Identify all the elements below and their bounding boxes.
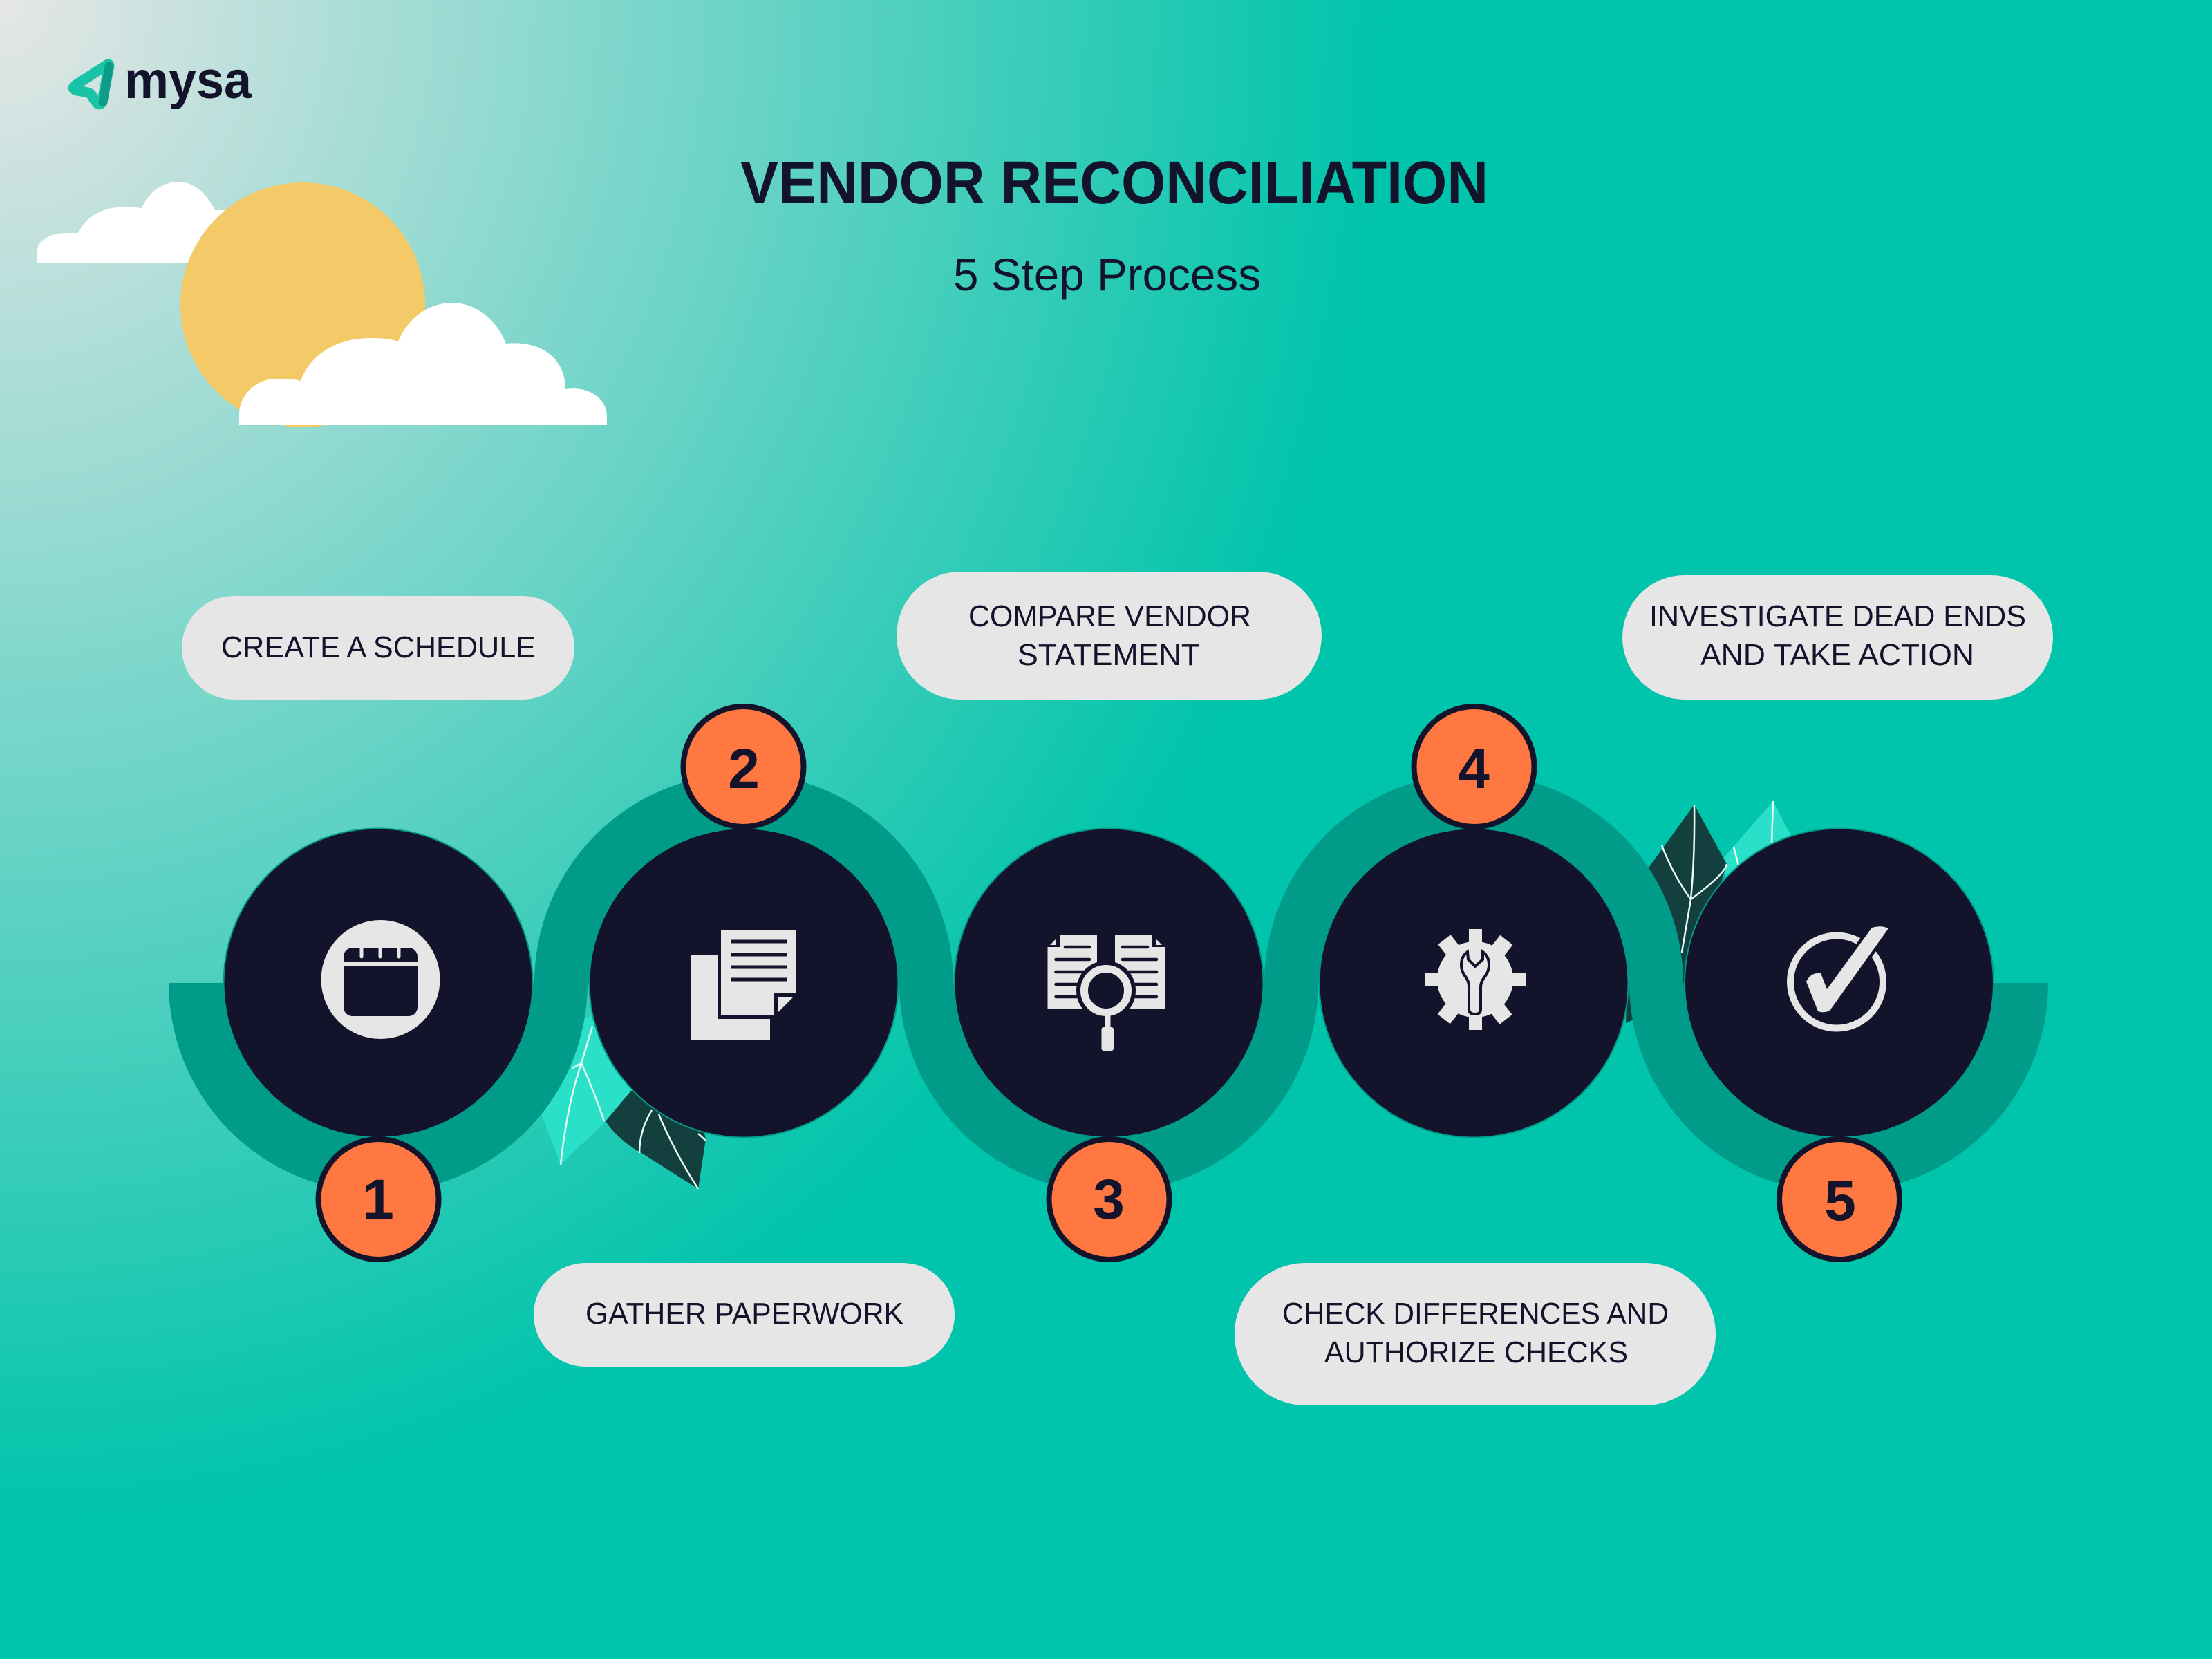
ring 1 (169, 983, 588, 1192)
icon: documents with magnifier (1048, 935, 1165, 1051)
title: VENDOR RECONCILIATION (740, 149, 1488, 216)
icon: logo arrow (73, 64, 109, 104)
subtitle: 5 Step Process (953, 249, 1261, 300)
pill: compare vendor statement: STATEMENT (1018, 638, 1200, 672)
step 5 circle (1685, 828, 1994, 1138)
badge 2: 2 (728, 738, 760, 800)
logo: mysa (73, 51, 252, 110)
icon: documents (691, 928, 799, 1040)
pill: compare vendor statement (897, 572, 1322, 700)
pill: check differences: CHECK DIFFERENCES AND (1282, 1297, 1669, 1331)
badge 4: 4 (1458, 738, 1490, 800)
icon: back cloud (37, 182, 238, 263)
pill: investigate dead ends (1622, 575, 2053, 700)
pill: check differences: AUTHORIZE CHECKS (1324, 1335, 1628, 1369)
icon: gear with wrench (1425, 929, 1526, 1030)
leaves: upper right (1626, 801, 1804, 1023)
badge 2 (683, 706, 803, 827)
pill: check differences (1235, 1263, 1716, 1405)
badge 3: 3 (1093, 1168, 1125, 1231)
icon: calendar (321, 920, 440, 1039)
pill: gather paperwork: GATHER PAPERWORK (585, 1297, 903, 1331)
wave rings (169, 774, 2048, 1192)
badge 1: 1 (362, 1168, 394, 1231)
icon: check mark in ring (1790, 926, 1888, 1029)
ring 4 (1264, 774, 1683, 983)
ring 3 (899, 983, 1318, 1192)
badge 4 (1414, 706, 1535, 827)
pill: investigate dead ends: INVESTIGATE DEAD ENDS (1649, 599, 2026, 633)
step 4 circle (1319, 828, 1629, 1138)
step 1 circle (224, 828, 532, 1138)
pill: gather paperwork (534, 1263, 955, 1367)
badge 1 (318, 1139, 438, 1259)
ring 2 (534, 774, 953, 983)
badge 5: 5 (1824, 1170, 1856, 1232)
step 3 circle (954, 828, 1264, 1138)
leaves: lower left (536, 1016, 706, 1189)
illustration: sun and clouds (37, 182, 607, 427)
pill: investigate dead ends: AND TAKE ACTION (1700, 638, 1974, 672)
logo wordmark: mysa (124, 51, 252, 110)
icon: front cloud (239, 303, 607, 425)
badge 3 (1049, 1139, 1170, 1259)
pill: create a schedule (182, 596, 574, 700)
badge 5 (1779, 1139, 1900, 1259)
step 2 circle (589, 828, 899, 1138)
pill: create a schedule: CREATE A SCHEDULE (221, 630, 536, 664)
ring 5 (1629, 983, 2048, 1192)
icon: sun (180, 182, 425, 427)
pill: compare vendor statement: COMPARE VENDOR (968, 599, 1251, 633)
